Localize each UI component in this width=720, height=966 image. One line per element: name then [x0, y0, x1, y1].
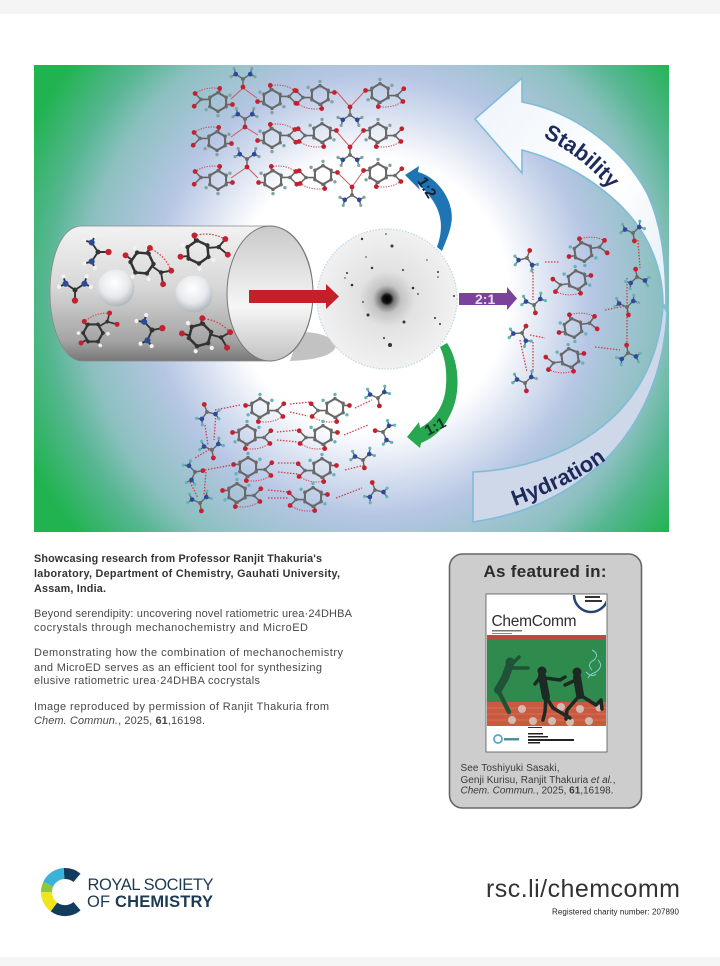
- red stripe: [487, 635, 606, 640]
- summary: Demonstrating how the combination of mechanochemistry: [34, 647, 344, 659]
- image credit: Image reproduced by permission of Ranjit Thakuria from: [34, 701, 329, 713]
- citation: Chem. Commun., 2025, 61,16198.: [460, 786, 614, 796]
- summary: and MicroED serves as an efficient tool for synthesizing: [34, 662, 322, 674]
- jar opening: [227, 226, 313, 361]
- arrow: hydration band: [472, 306, 668, 523]
- cover publisher logo: [494, 735, 502, 743]
- cover small print: [528, 733, 543, 734]
- green field: [487, 640, 606, 703]
- label: Hydration: Hydration: [510, 452, 606, 506]
- logo wordmark: [87, 876, 214, 911]
- cover arc: [572, 595, 606, 614]
- journal URL: rsc.li/chemcomm: [486, 875, 680, 903]
- showcase statement: [34, 553, 340, 595]
- citation: [460, 763, 616, 796]
- arrow: red process arrow: [249, 284, 339, 309]
- showcase statement: Showcasing research from Professor Ranjit Thakuria's: [34, 553, 322, 565]
- logo wordmark: ROYAL SOCIETY: [88, 876, 214, 894]
- milling ball right: [176, 276, 212, 312]
- panel: as featured in: [450, 554, 642, 808]
- arrow: stability: [474, 76, 667, 306]
- reagent molecules: [57, 230, 236, 362]
- milling ball left: [98, 270, 134, 306]
- label: Stability: Stability: [545, 126, 618, 187]
- summary: elusive ratiometric urea·24DHBA cocrystals: [34, 675, 260, 687]
- bottom grey strip: [0, 957, 720, 966]
- showcase statement: Assam, India.: [34, 583, 106, 595]
- label: 2:1: 2:1: [475, 291, 495, 307]
- top grey strip: [0, 0, 720, 14]
- citation: Genji Kurisu, Ranjit Thakuria et al.,: [460, 775, 616, 786]
- charity number: Registered charity number: 207890: [552, 908, 680, 916]
- molecular sheet: 2:1 cocrystal: [504, 219, 652, 396]
- milling jar cylinder: [50, 226, 313, 362]
- citation: See Toshiyuki Sasaki,: [460, 763, 560, 774]
- showcase statement: laboratory, Department of Chemistry, Gauhati University,: [34, 568, 340, 580]
- teal swirls: [586, 650, 601, 678]
- panel: cover artwork: [34, 65, 669, 532]
- journal masthead: ChemComm: [492, 613, 576, 630]
- heading: As featured in:: [484, 562, 606, 581]
- track molecule rosettes: [508, 703, 602, 726]
- runner silhouettes: [498, 657, 602, 720]
- diffraction pattern: [317, 229, 457, 369]
- summary: [34, 647, 344, 687]
- text block: research description: [34, 553, 353, 727]
- image credit: [34, 701, 329, 727]
- molecular sheet: 1:2 cocrystal: [191, 67, 406, 207]
- journal cover thumbnail: [486, 578, 608, 752]
- logo mark: [46, 873, 77, 911]
- article title: cocrystals through mechanochemistry and MicroED: [34, 622, 308, 634]
- milling jar shadow: [290, 332, 336, 361]
- label: 1:2: 1:2: [414, 174, 440, 202]
- volume text: [585, 596, 600, 598]
- arrow: purple 2:1: [459, 287, 517, 310]
- arrow: blue 1:2: [405, 166, 452, 251]
- logo: Royal Society of Chemistry: [46, 873, 214, 911]
- article title: Beyond serendipity: uncovering novel ratiometric urea·24DHBA: [34, 608, 353, 620]
- artwork background gradient: [34, 65, 669, 532]
- running track: [487, 702, 606, 726]
- article title: [34, 608, 353, 634]
- logo wordmark: OF CHEMISTRY: [87, 893, 213, 911]
- label: 1:1: 1:1: [422, 414, 449, 440]
- arrow: green 1:1: [407, 343, 458, 448]
- molecular sheet: 1:1 cocrystal: [181, 384, 397, 516]
- image credit: Chem. Commun., 2025, 61,16198.: [34, 715, 205, 727]
